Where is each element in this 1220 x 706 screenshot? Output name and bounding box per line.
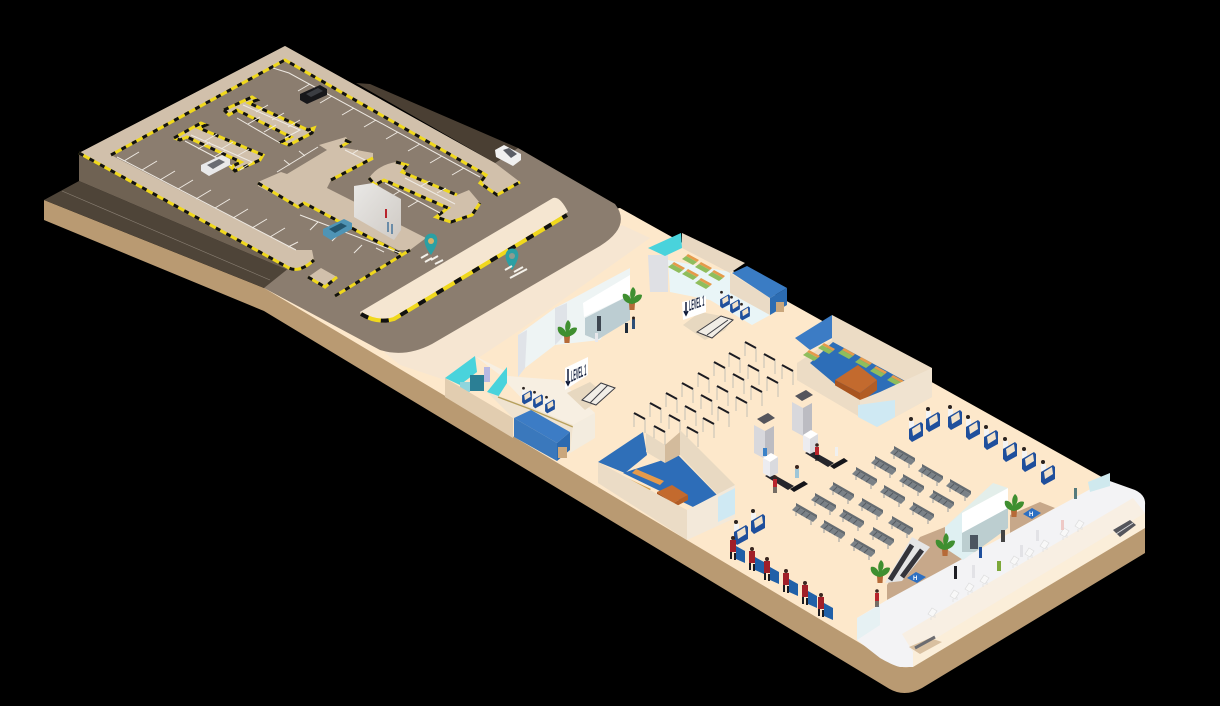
people at entrance bbox=[595, 316, 635, 342]
back wall bbox=[682, 233, 745, 273]
top right room bbox=[648, 233, 787, 325]
queue barriers bbox=[634, 342, 793, 447]
front wall bbox=[797, 363, 860, 417]
desk agents bbox=[720, 291, 750, 320]
main entrance bbox=[871, 483, 1077, 607]
main entrance floor bbox=[887, 502, 1055, 600]
lower left room bbox=[445, 356, 595, 461]
floor H icon left bbox=[907, 572, 926, 583]
pale inner walkway bbox=[902, 498, 1145, 652]
blue front bbox=[514, 418, 557, 461]
seats bbox=[803, 343, 904, 386]
location pin 1 with crossing bbox=[421, 234, 443, 264]
pale glass floor bbox=[668, 260, 770, 325]
blue roof bbox=[514, 410, 570, 443]
escalator group with level sign, lower bbox=[565, 357, 615, 410]
drop-off island bbox=[360, 198, 568, 321]
cream walkway bbox=[913, 513, 1145, 667]
tan landing bbox=[683, 312, 733, 340]
rear slope behind car park bbox=[356, 83, 518, 163]
right wall bbox=[570, 413, 595, 453]
lower escalator bbox=[909, 637, 942, 654]
kerb markings bbox=[79, 60, 520, 296]
car: black bbox=[300, 85, 327, 104]
blue roof bbox=[598, 432, 647, 473]
glass door bbox=[858, 400, 895, 427]
escalator bbox=[582, 383, 615, 405]
desk agents bbox=[522, 387, 555, 413]
plants bbox=[871, 494, 1024, 583]
blue floor bbox=[623, 455, 717, 507]
white sign panel bbox=[583, 275, 630, 317]
glazing band bbox=[518, 268, 630, 377]
ticket machines bbox=[460, 367, 490, 392]
far escalator bbox=[1113, 520, 1136, 537]
teal panel right bbox=[487, 367, 507, 397]
car: blue bbox=[323, 219, 352, 240]
glazing bbox=[945, 488, 1008, 560]
benches bbox=[620, 469, 664, 493]
front wall bbox=[598, 462, 687, 540]
pale concourse strip between car park and rooms bbox=[384, 225, 650, 380]
passengers at seats bbox=[730, 536, 833, 620]
security scanners bbox=[754, 390, 848, 493]
doors bbox=[558, 447, 567, 458]
drop-off island kerb bbox=[361, 215, 567, 321]
glass column right bbox=[555, 303, 567, 345]
seat rows bbox=[668, 254, 725, 289]
front glass frontage bbox=[857, 473, 1145, 667]
wood table bbox=[657, 485, 688, 508]
scanner arch 1 bbox=[754, 413, 775, 459]
teal wall bbox=[648, 233, 682, 256]
lower road and retaining wall bbox=[44, 83, 518, 288]
location pin 2 with crossing bbox=[505, 248, 527, 278]
car: white, by rear gate bbox=[495, 145, 521, 166]
glass door bbox=[718, 488, 735, 522]
parking bay lines bbox=[117, 68, 480, 253]
check-in desks bbox=[909, 405, 1055, 485]
escalator bbox=[697, 316, 733, 338]
glass kiosk bbox=[354, 183, 401, 240]
baggage belt 2 bbox=[803, 430, 848, 469]
lower centre room bbox=[598, 430, 735, 540]
teal panel left bbox=[445, 356, 477, 385]
retaining wall bbox=[79, 153, 314, 272]
doors bbox=[962, 508, 1008, 552]
glass canopy corner bbox=[1088, 473, 1110, 492]
tan landing bbox=[567, 382, 606, 410]
wall under blue roof bbox=[730, 273, 770, 315]
lower access road bbox=[44, 181, 292, 288]
escalator group with level sign, upper bbox=[682, 291, 750, 340]
desks bbox=[734, 509, 765, 545]
blue roof bbox=[795, 315, 832, 350]
baggage belt 1 bbox=[763, 453, 808, 492]
escalators bbox=[885, 537, 930, 583]
doors bbox=[776, 302, 784, 312]
sign panel bbox=[962, 488, 1008, 533]
tan floor left of doors bbox=[887, 527, 965, 600]
entrance doors bbox=[585, 295, 630, 340]
front wall bbox=[445, 378, 513, 438]
waiting benches bbox=[792, 446, 971, 560]
room floor bbox=[475, 356, 595, 425]
car park bbox=[79, 46, 621, 353]
tan floor right of doors bbox=[1010, 502, 1055, 533]
floor H icon right: H bbox=[1029, 512, 1033, 518]
terminal floor bbox=[264, 208, 1145, 667]
upper right room bbox=[795, 315, 932, 427]
outer glass face bbox=[857, 480, 1145, 667]
blue side bbox=[557, 432, 570, 461]
escalator group with level sign, lower: LEVEL 1 bbox=[571, 362, 586, 386]
right wall bbox=[687, 485, 735, 540]
security staff bbox=[763, 443, 838, 493]
escalator group with level sign, upper: LEVEL 1 bbox=[689, 293, 704, 315]
back wall bbox=[797, 315, 932, 427]
parking islands bbox=[174, 97, 480, 287]
car: white, lower island bbox=[201, 155, 230, 176]
perimeter kerb strips bbox=[79, 46, 520, 269]
counter wall bbox=[487, 392, 573, 450]
people on frontage bbox=[875, 488, 1077, 607]
glass column bbox=[648, 255, 668, 292]
plant right bbox=[623, 287, 642, 310]
right wall bbox=[860, 368, 932, 427]
asphalt surface bbox=[79, 46, 621, 353]
floor H icon right bbox=[1023, 508, 1041, 519]
floor H icon left: H bbox=[913, 576, 917, 582]
trolleys bbox=[928, 520, 1084, 620]
left entrance glass facade bbox=[518, 268, 642, 377]
lower left seating bbox=[730, 509, 833, 620]
terminal base: tan side of the slab bbox=[44, 200, 1145, 693]
plant left bbox=[558, 320, 577, 343]
column bbox=[646, 432, 680, 463]
blue roof bbox=[732, 266, 787, 298]
blue floor bbox=[810, 342, 907, 405]
canopy bbox=[945, 483, 1008, 527]
scanner arch 2 bbox=[792, 390, 813, 436]
glass column left bbox=[518, 330, 527, 377]
blue side bbox=[770, 288, 787, 315]
wood table bbox=[835, 365, 877, 403]
back wall bbox=[680, 430, 735, 500]
